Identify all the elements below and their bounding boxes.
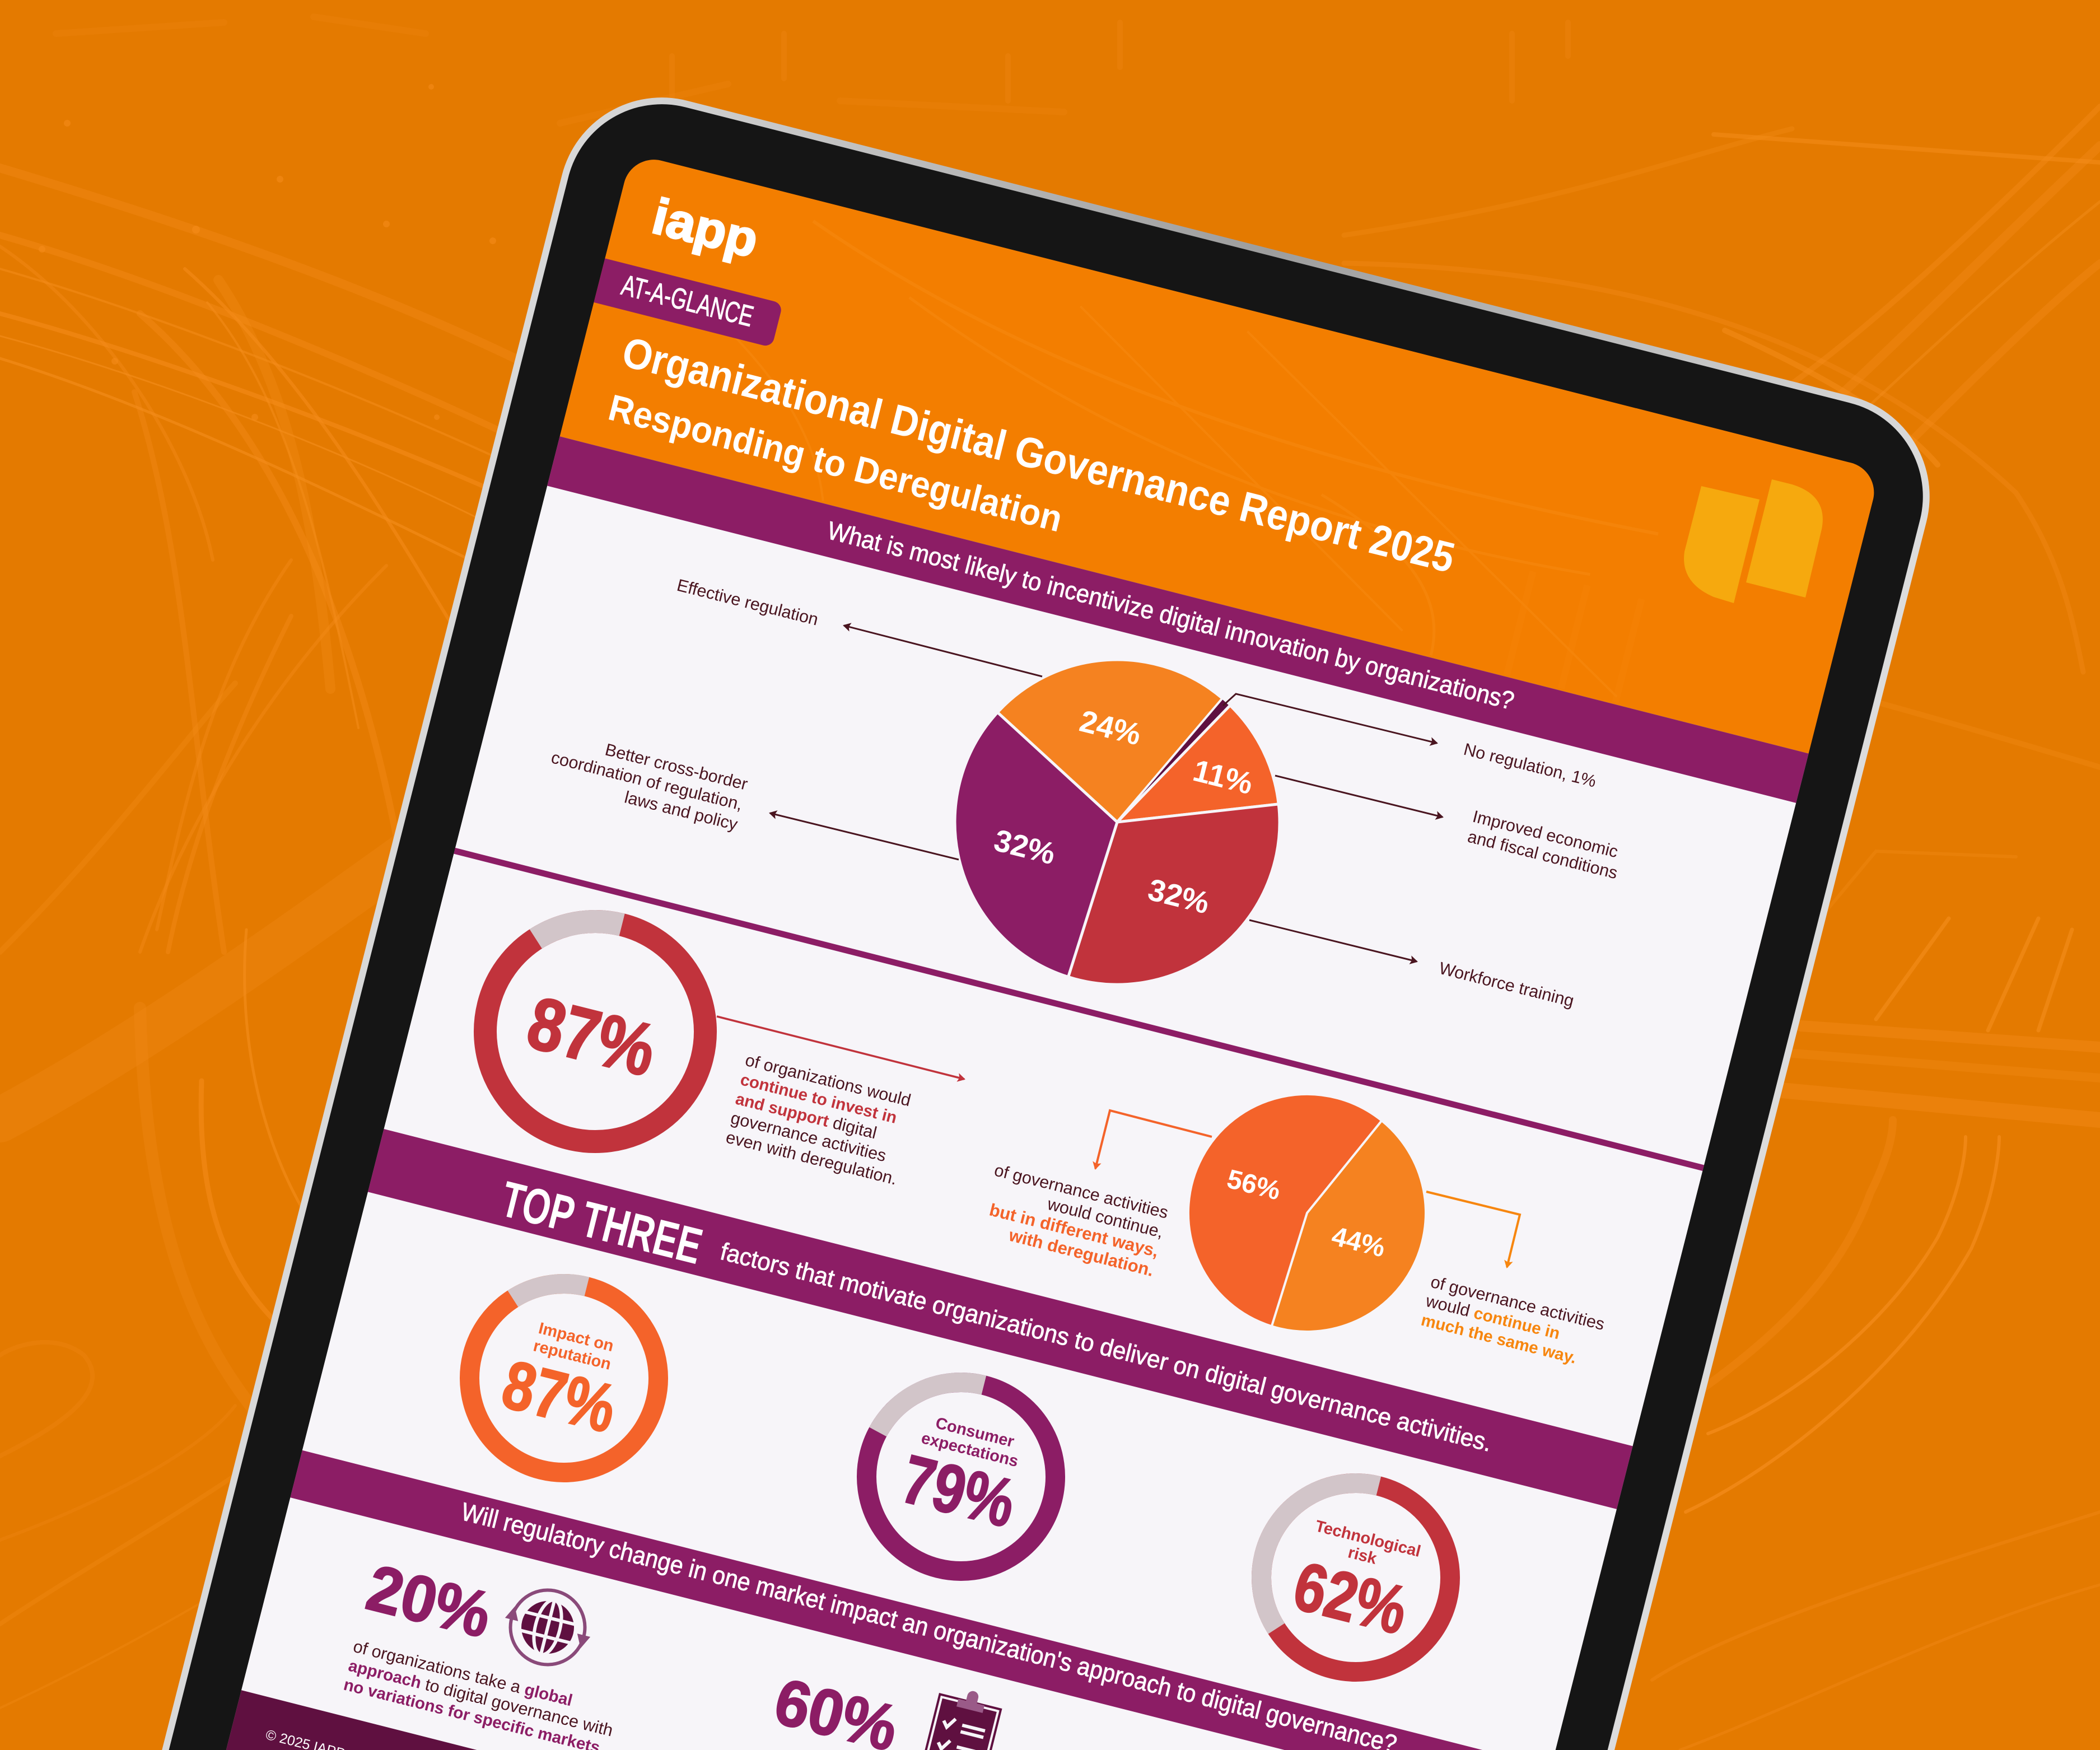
subtitle: Responding to Deregulation	[605, 386, 1067, 540]
text: continue to invest: and support digital	[734, 1090, 879, 1142]
text: same way: of governance activities	[1429, 1272, 1607, 1334]
at-a-glance label: AT-A-GLANCE	[618, 269, 757, 333]
label: improved conditions: Improved economic	[1471, 807, 1620, 861]
donut text: technological risk: 62%	[1286, 1547, 1415, 1649]
label: cross-border coordination: laws and policy	[623, 787, 740, 834]
pie chart: continuity	[1163, 1069, 1451, 1357]
donut text: reputation: Impact on	[536, 1319, 615, 1355]
label: cross-border coordination: coordination of regulation,	[549, 748, 745, 814]
icon: clipboard checklist	[908, 1683, 1005, 1750]
band: regulatory change	[290, 1450, 1551, 1750]
donut text: technological risk: Technological	[1313, 1517, 1422, 1561]
top three subheading: factors that motivate organizations to deliver on digital governance activities.	[718, 1238, 1495, 1457]
watermark logo	[1684, 479, 1823, 603]
label: effective regulation: Effective regulation	[675, 576, 820, 629]
pie labels: 32%	[991, 823, 1059, 871]
pie labels: 11%	[1189, 753, 1256, 801]
donut: technological risk 62%	[1242, 1463, 1470, 1692]
donut text: consumer expectations: expectations	[920, 1429, 1020, 1471]
pie labels: continuity	[1224, 1164, 1388, 1263]
text: continue to invest: of organizations would	[743, 1051, 913, 1110]
donut text: reputation	[495, 1319, 623, 1447]
slice: no regulation 1%	[1117, 681, 1231, 842]
at-a-glance badge	[594, 258, 783, 348]
donut text: consumer expectations: 79%	[894, 1440, 1023, 1542]
top three heading: TOP THREE	[496, 1171, 708, 1275]
text: different ways: with deregulation.	[1006, 1225, 1156, 1280]
text: continue to invest: continue to invest in	[739, 1070, 899, 1127]
donut: reputation 87%	[450, 1264, 678, 1492]
callout: 56%	[1095, 1110, 1212, 1169]
label: cross-border coordination: Better cross-border	[603, 740, 750, 794]
iapp logo: iapp	[647, 188, 764, 269]
donut text: consumer expectations	[894, 1414, 1023, 1542]
section divider	[454, 848, 1704, 1171]
slice: cross-border coordination 32%	[920, 708, 1136, 979]
text: same way: would continue in	[1424, 1291, 1562, 1343]
slice: improved conditions 11%	[1117, 685, 1299, 859]
slice: effective regulation 24%	[979, 630, 1226, 839]
donut: 87% invest	[462, 898, 729, 1165]
slice: 56%	[1163, 1069, 1384, 1340]
text: global approach: approach to digital governance with	[347, 1656, 615, 1740]
label: no regulation: No regulation, 1%	[1462, 740, 1598, 791]
pie labels: continuity: 56%	[1224, 1164, 1284, 1206]
donut text: reputation: reputation	[531, 1337, 613, 1374]
pie labels: 24%	[1076, 703, 1145, 752]
arrow: 87%	[717, 1016, 964, 1079]
text: different ways: but in different ways,	[987, 1200, 1161, 1261]
callout lines: pie	[770, 626, 1443, 962]
text: different ways: of governance activities	[992, 1160, 1170, 1222]
text: continue to invest: governance activities	[729, 1108, 888, 1165]
title: Organizational Digital Governance Report 2025	[618, 328, 1459, 582]
text: continue to invest: even with deregulation.	[724, 1128, 899, 1189]
text: global approach: of organizations take a global	[351, 1637, 575, 1710]
callout: 44%	[1426, 1192, 1520, 1267]
pie labels: continuity: 44%	[1329, 1221, 1388, 1263]
donut value: 87%: 87%	[520, 981, 664, 1092]
stat: 20%: 20%	[360, 1551, 498, 1651]
donut text: technological risk: risk	[1346, 1543, 1379, 1568]
donut text: technological risk	[1286, 1517, 1422, 1649]
footer band	[226, 1690, 477, 1750]
icon: globe with arrows	[496, 1581, 599, 1674]
text: different ways: would continue,	[1045, 1194, 1165, 1242]
pie chart: incentives	[920, 625, 1314, 1019]
pie labels	[991, 703, 1256, 921]
donut text: consumer expectations: Consumer	[934, 1414, 1016, 1451]
heading: incentive question: What is most likely to incentivize digital innovation by organizations?	[825, 516, 1517, 715]
donut text: reputation: 87%	[495, 1346, 623, 1447]
tablet screen	[131, 153, 1880, 1750]
slice: workforce training 32%	[1068, 765, 1289, 1019]
content background	[132, 436, 1809, 1750]
pie labels: 32%	[1145, 872, 1213, 921]
donut: consumer expectations 79%	[847, 1362, 1075, 1591]
label: workforce training: Workforce training	[1437, 959, 1576, 1011]
text: same way: much the same way.	[1419, 1311, 1579, 1368]
band: top three	[368, 1129, 1633, 1509]
slice: 44%	[1272, 1107, 1448, 1357]
label: improved conditions: and fiscal conditions	[1466, 827, 1620, 883]
band: incentive question	[547, 436, 1809, 803]
